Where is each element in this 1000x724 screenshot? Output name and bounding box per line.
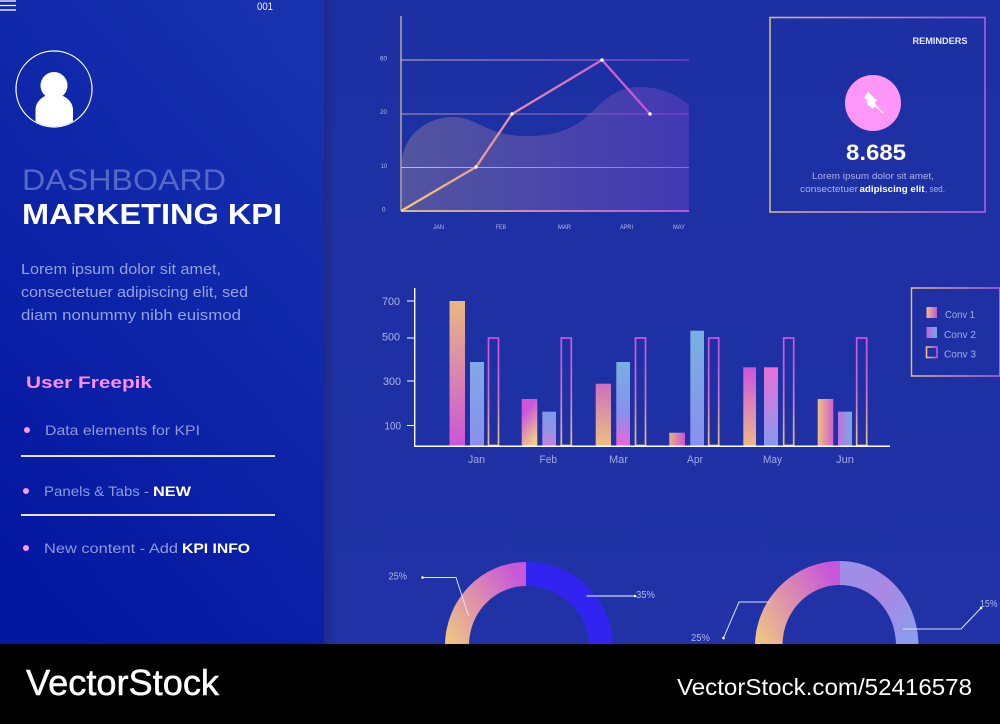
axes xyxy=(407,288,890,447)
page number: 001 xyxy=(257,1,273,13)
reminders description: Lorem ipsum dolor sit amet, xyxy=(812,171,934,181)
callout: 25 percent xyxy=(691,602,770,644)
list item: new content: New content - Add xyxy=(44,540,178,556)
x axis labels xyxy=(468,454,854,466)
footer image id: VectorStock.com/52416578 xyxy=(677,674,972,700)
callout: 35 percent xyxy=(586,590,655,601)
line series xyxy=(401,60,650,211)
donut segment: 25 percent xyxy=(445,562,526,646)
chart: donut two xyxy=(691,561,998,646)
data points xyxy=(474,58,652,169)
text block: intro: Lorem ipsum dolor sit amet, xyxy=(21,261,221,278)
heading: marketing kpi: MARKETING KPI xyxy=(22,199,282,231)
legend xyxy=(912,288,1000,376)
callout: 15 percent: 15% xyxy=(980,599,998,610)
bars: May xyxy=(743,338,794,446)
y axis labels: 20 xyxy=(380,109,387,116)
bars: Apr xyxy=(669,331,719,446)
x axis labels: Feb xyxy=(540,454,557,466)
area series xyxy=(402,87,689,211)
y axis labels: 500 xyxy=(382,332,400,344)
bars: Mar xyxy=(596,338,646,446)
reminders description xyxy=(800,171,945,194)
x axis labels: Jun xyxy=(836,454,854,466)
x axis labels: May xyxy=(763,454,782,466)
reminders description: consectetuer xyxy=(800,184,858,194)
y axis labels: 700 xyxy=(382,296,400,308)
donut segment: 25 percent xyxy=(755,561,840,646)
footer bar xyxy=(0,644,1000,724)
legend item: conv 1: Conv 1 xyxy=(945,309,975,321)
list item: panels and tabs: Panels & Tabs - xyxy=(44,483,149,499)
x axis labels: FEB xyxy=(496,224,506,231)
chart: monthly bar chart xyxy=(382,288,890,466)
y axis labels xyxy=(380,55,387,213)
y axis labels: 300 xyxy=(383,376,401,388)
callout: 25 percent: 25% xyxy=(691,633,710,644)
icon: pushpin xyxy=(845,75,901,131)
bars: Feb xyxy=(522,338,571,446)
list item: panels and tabs xyxy=(23,483,192,499)
list item: panels and tabs: NEW xyxy=(153,483,192,499)
legend item: conv 3: Conv 3 xyxy=(944,348,976,360)
text block: intro: diam nonummy nibh euismod xyxy=(21,307,241,324)
reminders heading: REMINDERS xyxy=(912,36,968,46)
y axis labels: 100 xyxy=(384,420,401,432)
reminders description: , sed. xyxy=(925,184,945,194)
legend item: conv 2: Conv 2 xyxy=(944,329,976,341)
x axis labels: MAY xyxy=(673,224,686,231)
panel: reminders xyxy=(770,18,985,212)
x axis labels: MAR xyxy=(558,224,571,231)
chart: donut one xyxy=(388,562,655,646)
list item: new content: KPI INFO xyxy=(182,540,250,556)
donut segment: 15 percent xyxy=(840,561,918,646)
callout: 35 percent: 35% xyxy=(636,590,655,601)
donut segment: 35 percent xyxy=(526,562,613,646)
y axis labels: 0 xyxy=(382,206,386,214)
list item: data elements: Data elements for KPI xyxy=(45,422,200,438)
panel: sidebar xyxy=(0,0,324,644)
heading: dashboard: DASHBOARD xyxy=(22,164,226,197)
x axis labels: APRI xyxy=(620,224,633,231)
callout: 25 percent xyxy=(388,572,468,616)
list item: new content xyxy=(23,540,250,556)
callout: 15 percent xyxy=(903,599,998,629)
bars: Jan xyxy=(450,301,498,446)
icon: user avatar xyxy=(16,51,92,130)
y axis labels: 60 xyxy=(380,55,387,62)
bars: Jun xyxy=(818,338,867,446)
sidebar drop shadow xyxy=(324,0,338,644)
user name: User Freepik xyxy=(26,373,153,392)
x axis labels: Jan xyxy=(468,454,485,466)
y axis labels xyxy=(382,296,401,432)
x axis labels: Apr xyxy=(687,454,703,466)
callout: 25 percent: 25% xyxy=(388,572,407,582)
text block: intro xyxy=(21,261,248,324)
x axis labels: Mar xyxy=(609,454,628,466)
icon: hamburger menu xyxy=(0,1,16,10)
y axis labels: 10 xyxy=(381,163,387,170)
x axis labels: JAN xyxy=(433,224,444,231)
reminders description: adipiscing elit xyxy=(860,184,924,194)
text block: intro: consectetuer adipiscing elit, sed xyxy=(21,284,248,301)
x axis labels xyxy=(433,224,686,231)
chart: line and area chart xyxy=(380,16,689,231)
footer logo: VectorStock xyxy=(26,662,220,703)
reminders value: 8.685 xyxy=(846,140,906,165)
